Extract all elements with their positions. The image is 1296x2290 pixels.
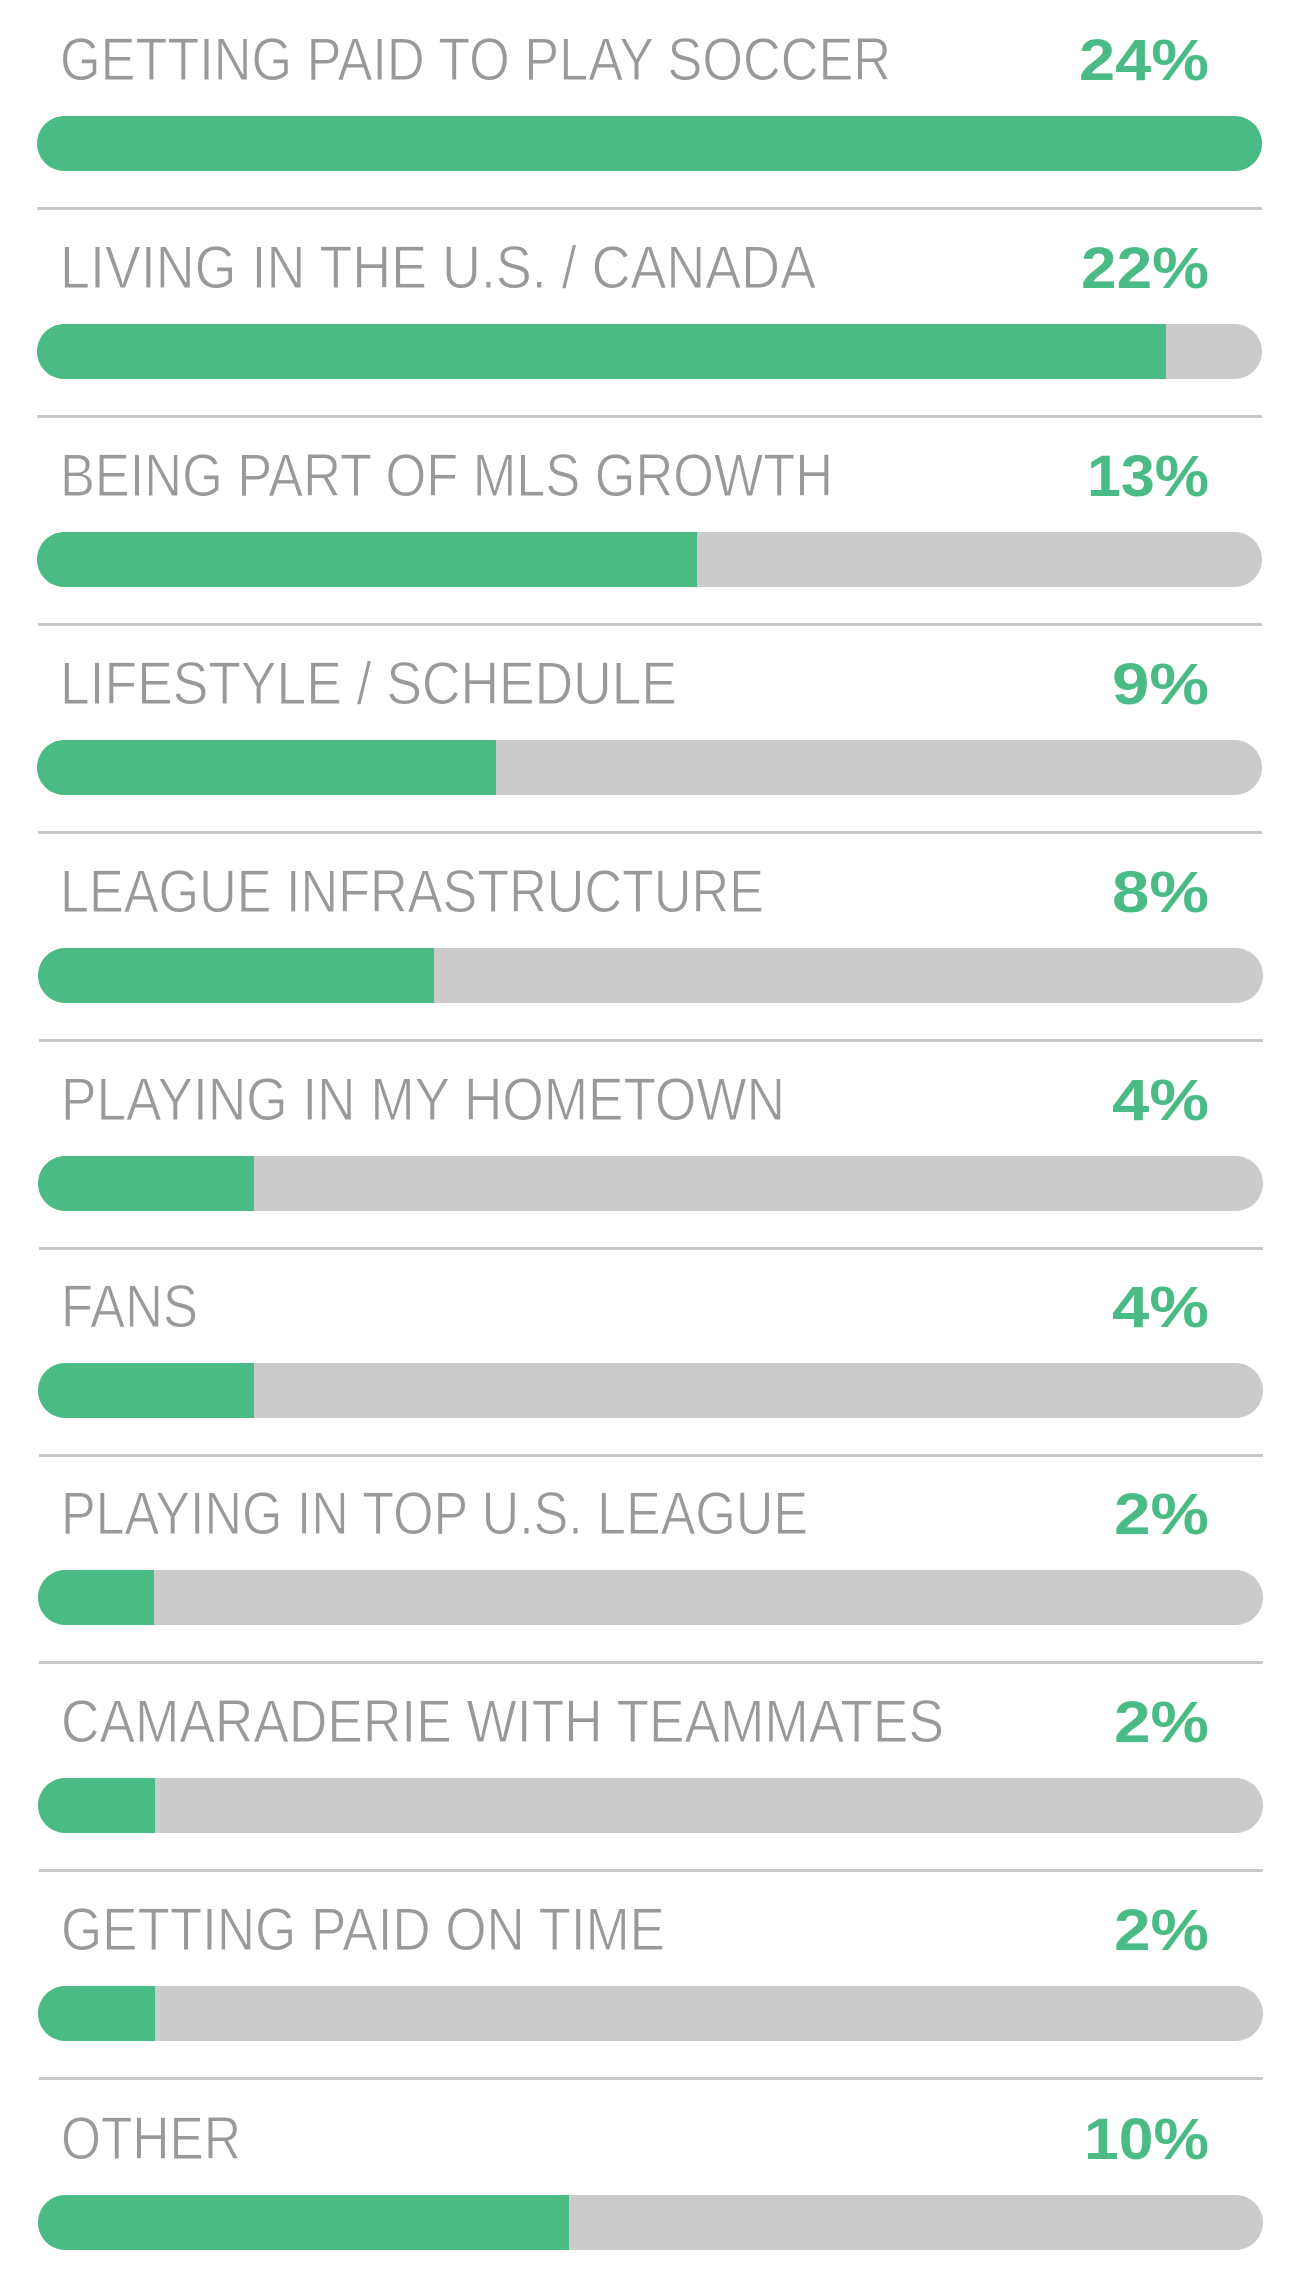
- row: being part of MLS growth: [37, 441, 1262, 587]
- bar: [38, 1986, 1263, 2041]
- label: GETTING PAID TO PLAY SOCCER: [60, 25, 891, 93]
- value: 10%: [1084, 2107, 1209, 2172]
- bar: [38, 2195, 1263, 2250]
- value: 13%: [1087, 444, 1209, 509]
- label: PLAYING IN TOP U.S. LEAGUE: [61, 1479, 808, 1547]
- bar: [37, 116, 1262, 171]
- bar: [37, 532, 1262, 587]
- row: getting paid on time: [38, 1895, 1263, 2041]
- row: playing in top U.S. league: [38, 1479, 1263, 1625]
- label: CAMARADERIE WITH TEAMMATES: [61, 1687, 944, 1755]
- bar: [37, 740, 1262, 795]
- row: getting paid to play soccer: [37, 25, 1262, 171]
- label: LIFESTYLE / SCHEDULE: [60, 649, 677, 717]
- row: league infrastructure: [38, 857, 1263, 1003]
- label: BEING PART OF MLS GROWTH: [60, 441, 833, 509]
- value: 8%: [1112, 860, 1209, 925]
- bar: [37, 324, 1262, 379]
- label: FANS: [61, 1272, 198, 1340]
- bar: [38, 1570, 1263, 1625]
- row: other: [38, 2104, 1263, 2250]
- label: LIVING IN THE U.S. / CANADA: [60, 233, 817, 301]
- label: GETTING PAID ON TIME: [61, 1895, 665, 1963]
- bar: [38, 1363, 1263, 1418]
- value: 22%: [1081, 236, 1209, 301]
- label: LEAGUE INFRASTRUCTURE: [60, 857, 764, 925]
- bar: [38, 1778, 1263, 1833]
- label: PLAYING IN MY HOMETOWN: [61, 1065, 785, 1133]
- bar: [38, 1156, 1263, 1211]
- value: 2%: [1114, 1482, 1209, 1547]
- label: OTHER: [61, 2104, 241, 2172]
- row: living in the U.S. / Canada: [37, 233, 1262, 379]
- value: 4%: [1112, 1068, 1209, 1133]
- value: 9%: [1112, 652, 1209, 717]
- value: 2%: [1114, 1898, 1209, 1963]
- row: fans: [38, 1272, 1263, 1418]
- value: 4%: [1112, 1275, 1209, 1340]
- bar: [38, 948, 1263, 1003]
- value: 24%: [1079, 28, 1209, 93]
- row: lifestyle / schedule: [37, 649, 1262, 795]
- row: camaraderie with teammates: [38, 1687, 1263, 1833]
- row: playing in my hometown: [38, 1065, 1263, 1211]
- value: 2%: [1114, 1690, 1209, 1755]
